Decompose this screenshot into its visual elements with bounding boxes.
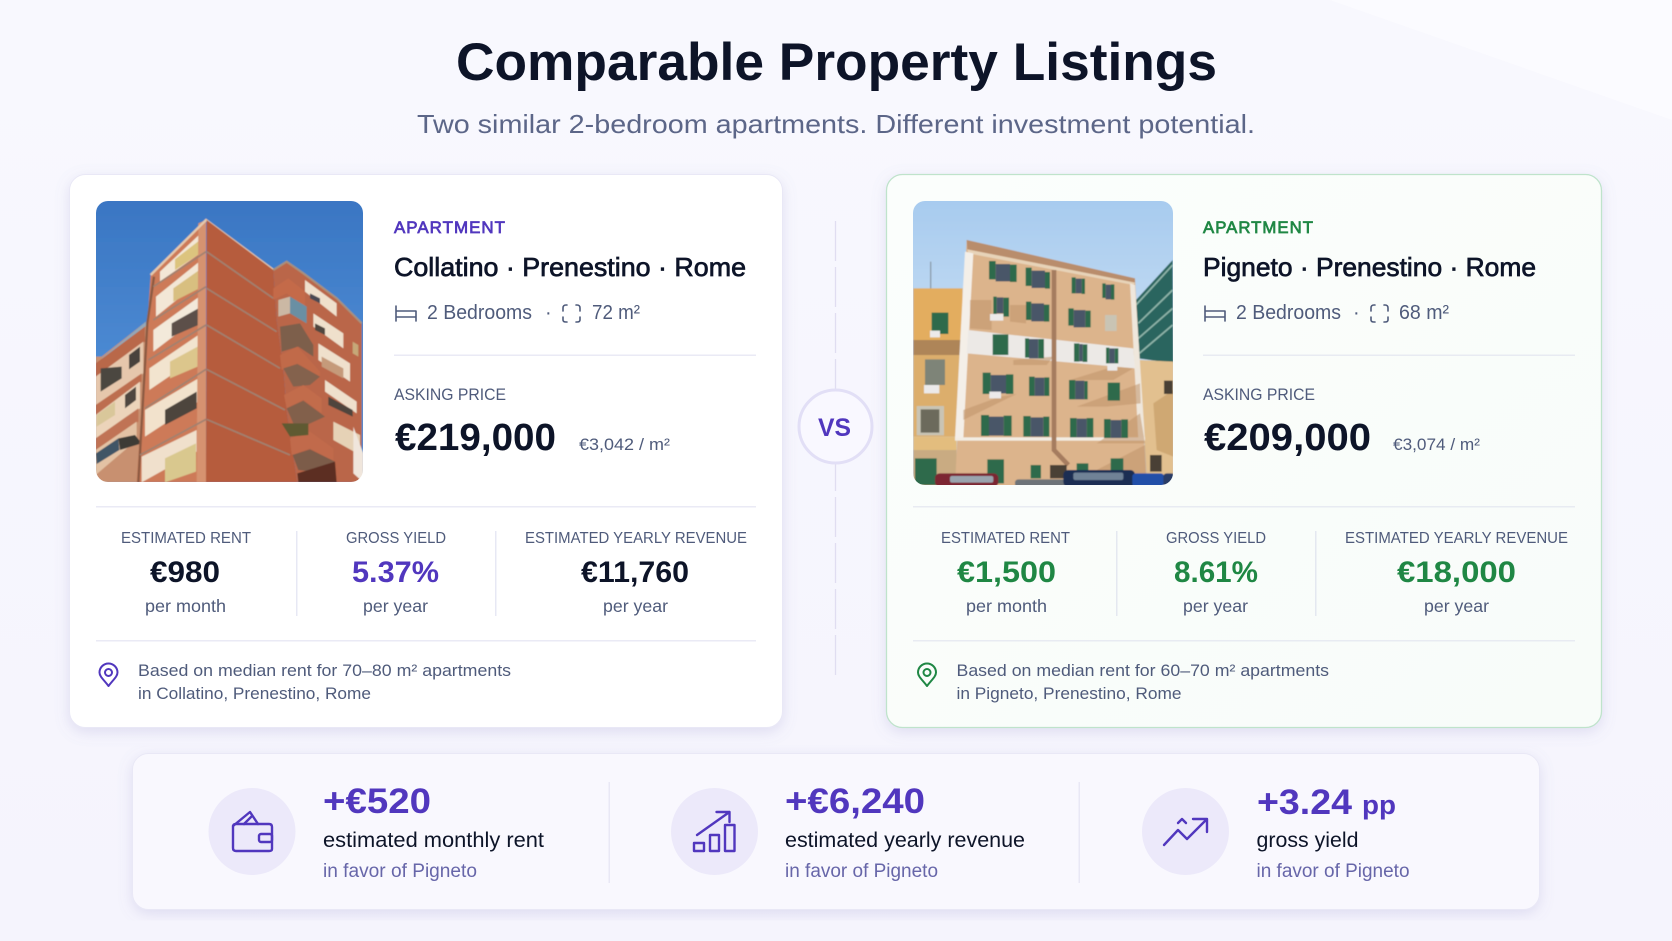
metric: estimated rent: per month [966,596,1047,616]
metric: gross yield: per year [1183,596,1248,616]
panel: Pigneto listing [886,174,1602,728]
metric: gross yield [346,530,446,616]
photo: beige apartment building [910,198,1177,488]
note: rent basis [138,661,511,703]
metric: estimated rent: ESTIMATED RENT [121,530,251,547]
note: rent basis: Based on median rent for 60–70 m² apartments [956,661,1329,680]
icon: location pin [100,664,118,686]
area: 68 m² [1399,302,1449,324]
metric: estimated yearly revenue [525,530,747,616]
stat: yearly revenue difference: estimated yearly revenue [785,829,1025,852]
category label: APARTMENT [394,219,506,237]
stat: gross yield difference: in favor of Pigneto [1256,861,1410,882]
listing name: Collatino · Prenestino · Rome [394,252,746,282]
price per square metre: €3,074 / m² [1393,435,1480,454]
metric: estimated rent: ESTIMATED RENT [941,530,1070,547]
metric: estimated yearly revenue: ESTIMATED YEARLY REVENUE [525,530,747,547]
bedrooms: 2 Bedrooms [1236,302,1341,324]
panel: summary of differences [132,754,1540,910]
asking price label: ASKING PRICE [394,386,506,404]
icon: area [1371,305,1388,322]
separator dot: · [545,302,552,324]
metric: estimated rent [941,530,1070,616]
stat: yearly revenue difference: +€6,240 [785,782,925,821]
icon: bed [1205,306,1225,321]
metric: gross yield: GROSS YIELD [346,530,446,547]
metric: gross yield: per year [363,596,428,616]
stat: gross yield difference: +3.24 [1257,783,1353,822]
metric: estimated yearly revenue: €11,760 [581,556,689,589]
icon: area [563,305,580,322]
asking price label: ASKING PRICE [1203,386,1315,404]
note: rent basis: in Pigneto, Prenestino, Rome [956,684,1182,703]
metric: estimated rent: €1,500 [957,556,1056,589]
metric: gross yield: GROSS YIELD [1166,530,1266,547]
badge: VS [799,390,872,463]
listing name: Pigneto · Prenestino · Rome [1203,252,1536,282]
stat: gross yield difference [1142,783,1410,882]
photo: red brick apartment building [93,200,367,483]
metric: estimated rent: per month [145,596,226,616]
stat: monthly rent difference: estimated monthly rent [323,829,544,852]
bedrooms: 2 Bedrooms [427,302,532,324]
note: rent basis: in Collatino, Prenestino, Rome [138,684,371,703]
stat: gross yield difference: pp [1362,790,1396,820]
stat: yearly revenue difference: in favor of Pigneto [785,861,938,882]
metric: gross yield: 5.37% [352,556,439,589]
separator dot: · [1353,302,1360,324]
metric: estimated yearly revenue: per year [603,596,668,616]
asking price: €209,000 [1204,417,1371,459]
stat: monthly rent difference: +€520 [323,782,431,821]
metric: estimated yearly revenue: €18,000 [1397,556,1516,589]
panel: Collatino listing [70,174,782,728]
title: Comparable Property Listings [456,33,1217,92]
price per square metre: €3,042 / m² [579,435,670,454]
metric: estimated yearly revenue: per year [1424,596,1489,616]
badge: VS: VS [818,414,851,442]
area: 72 m² [592,302,640,324]
subtitle: Two similar 2-bedroom apartments. Different investment potential. [417,109,1255,139]
icon: wallet [208,788,296,875]
icon: trending up [1142,788,1229,875]
metric: gross yield: 8.61% [1174,556,1258,589]
metric: gross yield [1166,530,1266,616]
stat: gross yield difference: gross yield [1256,829,1358,852]
divider: vertical dashed line [834,221,836,680]
icon: location pin [918,664,936,686]
metric: estimated rent: €980 [150,556,220,589]
metric: estimated rent [121,530,251,616]
category label: APARTMENT [1203,219,1314,237]
stat: yearly revenue difference [671,782,1025,882]
metric: estimated yearly revenue: ESTIMATED YEARLY REVENUE [1345,530,1568,547]
note: rent basis [956,661,1329,703]
note: rent basis: Based on median rent for 70–80 m² apartments [138,661,511,680]
icon: bed [396,306,416,321]
asking price: €219,000 [395,417,556,459]
stat: monthly rent difference: in favor of Pigneto [323,861,477,882]
metric: estimated yearly revenue [1345,530,1568,616]
stat: monthly rent difference [208,782,544,882]
icon: rising bar chart [671,788,758,875]
